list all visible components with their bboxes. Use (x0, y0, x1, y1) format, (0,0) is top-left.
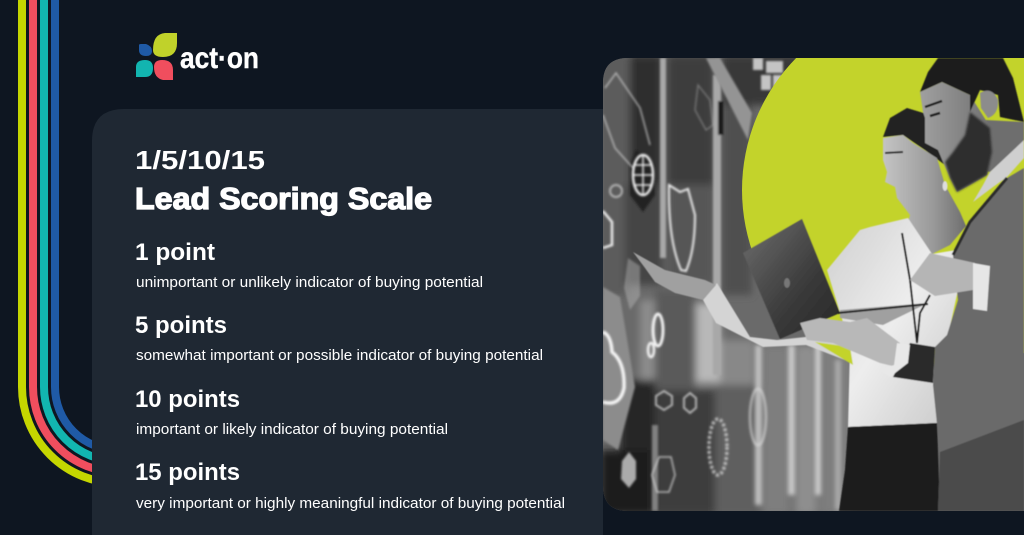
shapes on digital wall (603, 73, 766, 492)
woman: face and neck (883, 135, 966, 254)
woman: hand (633, 252, 716, 300)
man: ear (980, 91, 998, 118)
icon: logo petals (136, 33, 177, 80)
ceiling beam and lights (706, 58, 783, 140)
green gap below laptop (815, 342, 853, 365)
woman: earring (942, 181, 948, 191)
woman: white shirt (827, 218, 958, 427)
laptop (743, 219, 928, 339)
woman: hair (883, 108, 945, 165)
man: beard (945, 112, 992, 192)
pale hexagon panels (603, 150, 655, 488)
man: hair (920, 58, 1024, 122)
item: 5 points (135, 312, 543, 364)
item: 10 points (135, 386, 448, 438)
photo: team at digital screen (603, 58, 1024, 511)
item: 15 points (135, 459, 565, 512)
heading: scale: 1/5/10/15 (135, 145, 265, 175)
woman: dark trousers (839, 423, 940, 511)
man: neck (986, 120, 1024, 172)
heading: lead scoring scale: Lead Scoring Scale (135, 181, 432, 216)
decorative rainbow stripes (22, 0, 118, 483)
digital wall tonal areas (600, 55, 852, 515)
item: 1 point (135, 239, 483, 291)
item: 10 points: 10 points (135, 386, 240, 413)
lanyard (902, 233, 930, 343)
man: shirt collar (973, 140, 1024, 202)
item: 1 point: unimportant or unlikely indicator of buying potential (136, 274, 483, 291)
upper vertical light bars (652, 58, 723, 511)
logo wordmark: act·on (180, 42, 259, 75)
item: 10 points: important or likely indicator of buying potential (136, 421, 448, 438)
man: eye and brow (925, 101, 942, 116)
man: vest edge shadow (953, 178, 1007, 255)
bright cloud and circles (603, 314, 663, 403)
panel: lead scoring scale (92, 109, 603, 535)
green circle (742, 58, 1024, 363)
woman: brow (885, 152, 903, 153)
woman: pointing sleeve (703, 283, 850, 362)
lower soft light bars (755, 345, 841, 510)
item: 15 points: very important or highly meaningful indicator of buying potential (136, 495, 565, 512)
item: 1 point: 1 point (135, 239, 215, 266)
item: 5 points: 5 points (135, 312, 227, 339)
logo: act-on (136, 33, 259, 80)
man: face (920, 82, 992, 192)
man: lower hem and trousers (938, 420, 1024, 511)
man: arm, hand, cuff and sleeve under laptop (800, 318, 935, 383)
item: 15 points: 15 points (135, 459, 240, 486)
man: hand on chest and cuff (910, 253, 990, 311)
item: 5 points: somewhat important or possible indicator of buying potential (136, 347, 543, 364)
man: vest (932, 168, 1024, 445)
